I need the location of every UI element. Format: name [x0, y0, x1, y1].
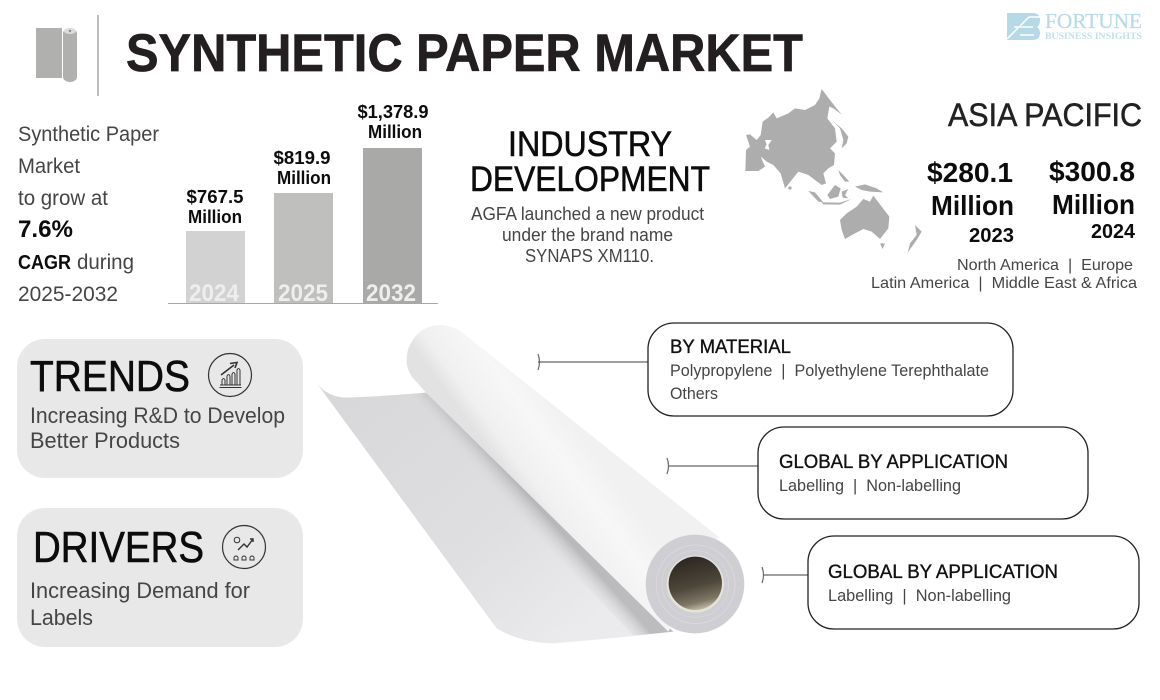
text block: Asia Pacific figures: Million: [931, 190, 1014, 221]
callout: global by application 1: GLOBAL BY APPLICATION: [779, 452, 1008, 473]
text block: Asia Pacific figures: Million: [1052, 189, 1135, 220]
text block: CAGR summary: Synthetic Paper: [18, 123, 159, 146]
text block: industry development: [470, 125, 710, 266]
logo: Fortune Business Insights: [1007, 9, 1142, 42]
panel: trends: [17, 339, 303, 478]
bar 2024: 2024: [189, 280, 240, 307]
text block: Asia Pacific figures: Latin America | Middle East & Africa: [871, 275, 1137, 292]
text block: Asia Pacific figures: North America | Europe: [957, 257, 1133, 274]
text block: Asia Pacific figures: 2024: [1091, 221, 1136, 243]
callout: by material: Polypropylene | Polyethylene Terephthalate: [670, 362, 989, 380]
text block: CAGR summary: [18, 123, 159, 306]
text block: industry development: INDUSTRY: [508, 125, 672, 164]
text block: CAGR summary: CAGR: [18, 252, 71, 274]
text block: industry development: DEVELOPMENT: [470, 160, 710, 199]
bar 2024: $767.5: [186, 187, 244, 207]
roll end: [646, 535, 744, 633]
callout: by material: [538, 323, 1013, 416]
callout: by material: Others: [670, 385, 718, 403]
text block: industry development: under the brand name: [502, 225, 673, 245]
callout: global by application 2: Labelling | Non-labelling: [828, 587, 1011, 605]
bar 2025: $819.9: [274, 148, 330, 168]
bar 2032: 2032: [366, 280, 416, 307]
logo: Fortune Business Insights: FORTUNE: [1045, 9, 1142, 33]
panel: drivers: Labels: [30, 605, 93, 630]
icon: demand growth: [222, 526, 266, 568]
callout: global by application 1: Labelling | Non-labelling: [779, 477, 961, 495]
text block: Asia Pacific figures: [871, 97, 1142, 292]
panel: drivers: DRIVERS: [33, 523, 204, 572]
panel: trends: Better Products: [30, 428, 180, 453]
text block: CAGR summary: Market: [18, 155, 80, 178]
icon: rising chart: [208, 354, 252, 396]
text block: CAGR summary: during: [77, 251, 134, 274]
bar 2032: Million: [368, 122, 422, 142]
panel: trends: TRENDS: [30, 352, 190, 401]
callout: global by application 1: [667, 427, 1088, 519]
callout: by material: BY MATERIAL: [670, 337, 791, 358]
bar 2032: [358, 102, 428, 307]
map: Asia Pacific: [745, 89, 922, 253]
callout: global by application 2: [762, 536, 1139, 629]
text block: Asia Pacific figures: $300.8: [1049, 156, 1135, 187]
title: SYNTHETIC PAPER MARKET: [126, 24, 803, 83]
bar 2024: Million: [188, 207, 242, 227]
image: paper roll: [317, 325, 744, 643]
bar 2032: $1,378.9: [358, 102, 428, 122]
bar chart: market size: [168, 102, 438, 307]
logo: Fortune Business Insights: BUSINESS INSIGHTS: [1045, 32, 1142, 42]
panel: drivers: Increasing Demand for: [30, 578, 250, 603]
callout: global by application 2: GLOBAL BY APPLICATION: [828, 562, 1058, 583]
panel: drivers: [17, 508, 303, 647]
bar 2025: Million: [277, 168, 331, 188]
bar 2025: [274, 148, 333, 307]
text block: Asia Pacific figures: $280.1: [927, 157, 1013, 188]
bar 2025: 2025: [278, 280, 328, 307]
roll body: [407, 325, 718, 632]
icon: paper roll: [36, 28, 77, 82]
text block: industry development: SYNAPS XM110.: [525, 246, 654, 266]
bar 2024: [186, 187, 245, 307]
text block: industry development: AGFA launched a new product: [471, 204, 704, 224]
text block: CAGR summary: to grow at: [18, 187, 108, 210]
text block: Asia Pacific figures: ASIA PACIFIC: [948, 97, 1142, 133]
paper sheet: [317, 384, 673, 643]
text block: CAGR summary: 2025-2032: [18, 283, 118, 306]
panel: trends: Increasing R&D to Develop: [30, 403, 285, 428]
text block: Asia Pacific figures: 2023: [969, 225, 1014, 247]
text block: CAGR summary: 7.6%: [18, 216, 73, 243]
